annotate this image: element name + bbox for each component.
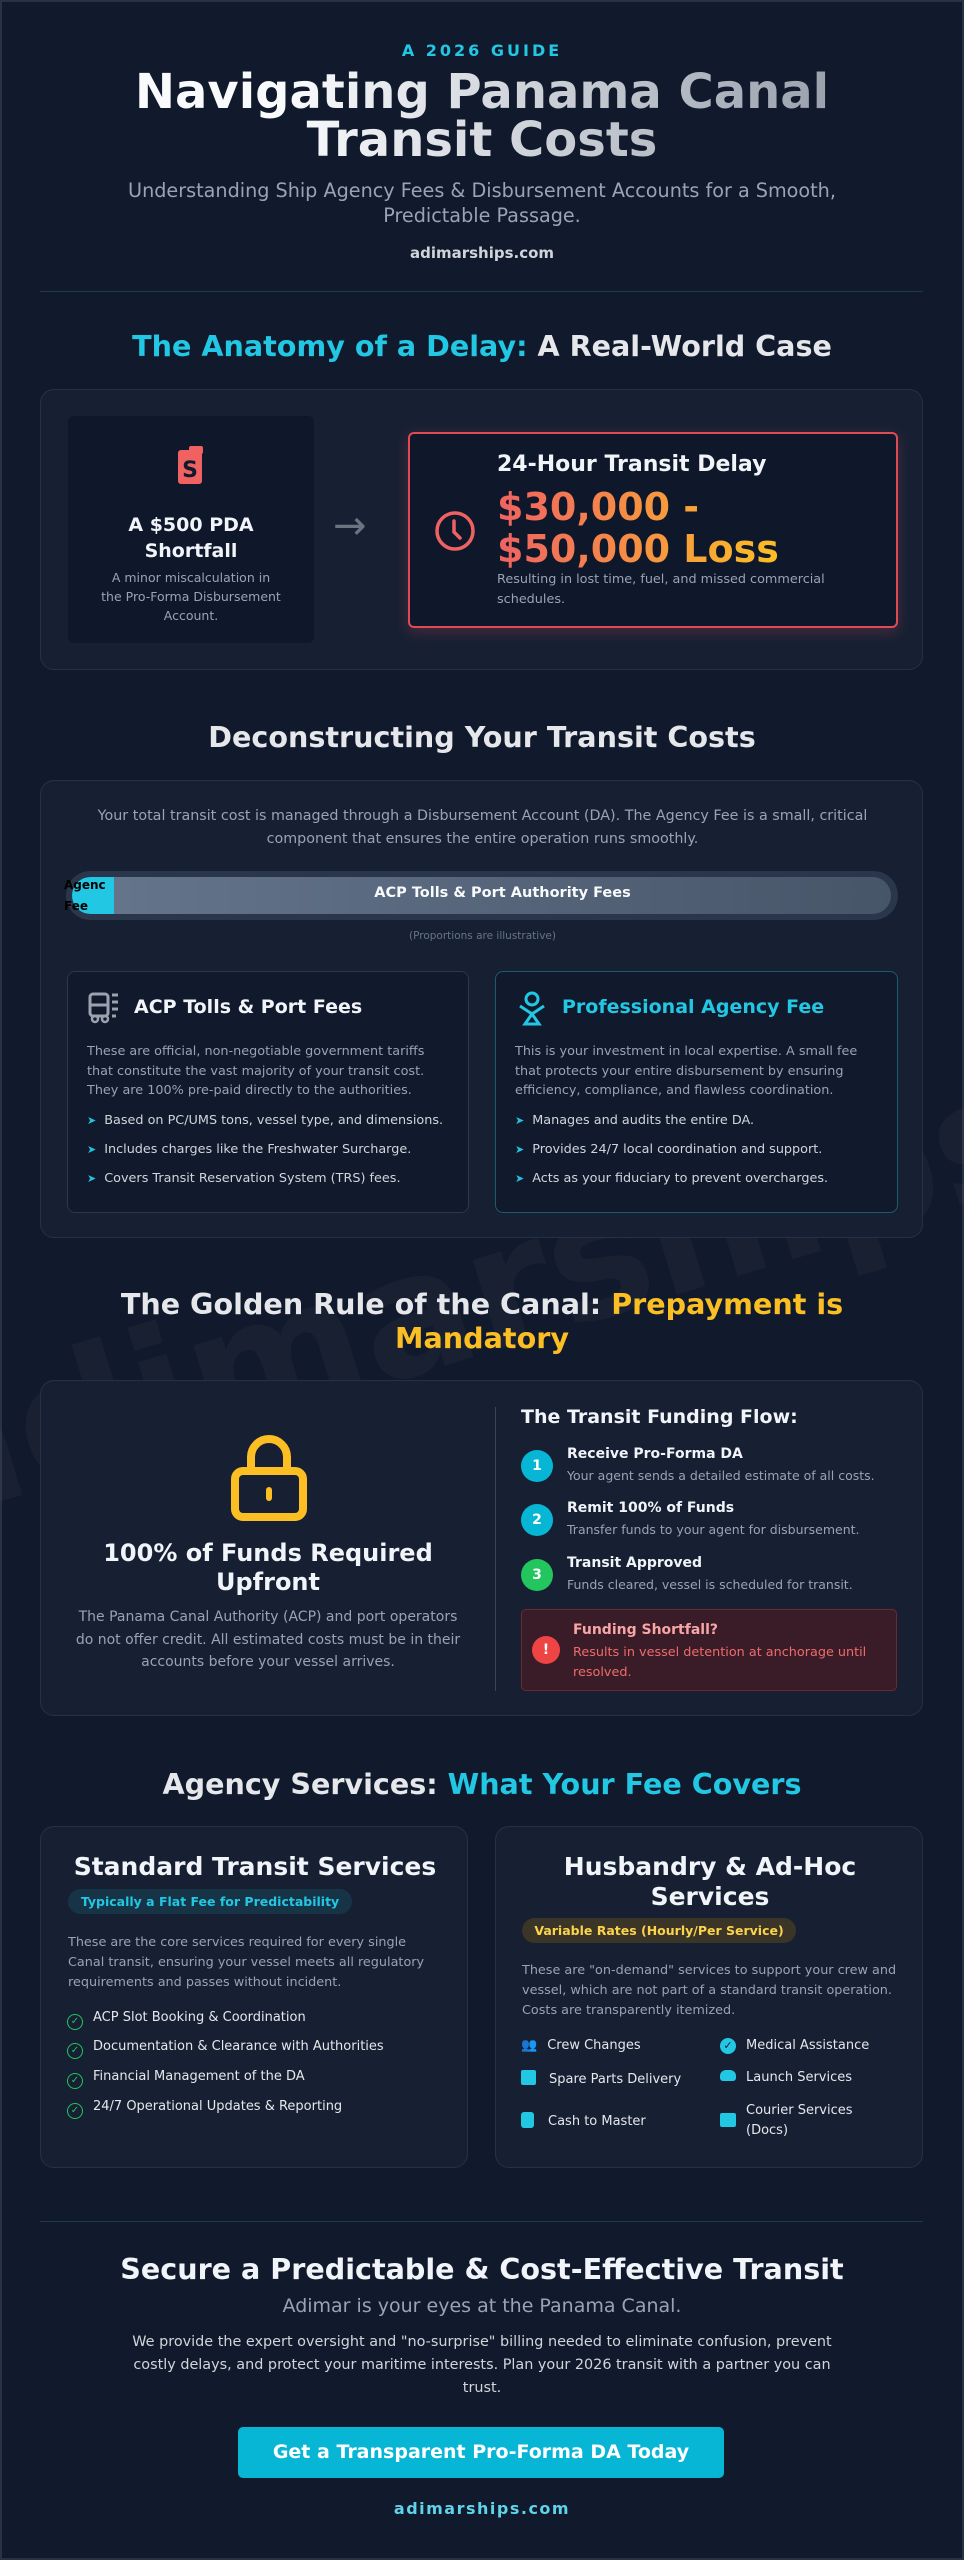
step 2 xyxy=(521,1500,860,1537)
services grid: Courier Services xyxy=(746,2103,853,2118)
checklist: ✓ xyxy=(71,2016,79,2027)
bar chart: proportions: Fee xyxy=(64,899,88,913)
card: ACP tolls: ACP Tolls & Port Fees xyxy=(134,996,362,1018)
card: agency fee: Professional Agency Fee xyxy=(562,996,824,1018)
left box: shortfall: A minor miscalculation in the Pro-Forma Disbursement Account. xyxy=(101,570,281,623)
panel: standard services: Standard Transit Services xyxy=(74,1852,436,1881)
CTA body: We provide the expert oversight and "no-surprise" billing needed to eliminate confusion, prevent costly delays, and protect your maritime interests. Plan your 2026 transit with a partner you can trust. xyxy=(132,2334,832,2396)
card: agency fee: This is your investment in local expertise. A small fee that protects your entire disbursement by ensuring efficiency, compliance, and flawless coordination. xyxy=(515,1044,857,1098)
panel: husbandry services: These are "on-demand" services to support your crew and vessel, which are not part of a standard transit operation. Costs are transparently itemized. xyxy=(522,1963,896,2018)
checklist: Documentation & Clearance with Authorities xyxy=(93,2039,384,2054)
icon: agent xyxy=(519,992,545,1026)
card: agency fee xyxy=(495,971,898,1213)
left box: shortfall: A $500 PDA xyxy=(128,514,254,536)
services grid: ✓ xyxy=(723,2039,733,2052)
icon: toll xyxy=(88,992,118,1024)
card: ACP tolls: ➤ Includes charges like the Freshwater Surcharge. xyxy=(87,1142,411,1157)
button xyxy=(238,2427,724,2478)
checklist xyxy=(67,2010,384,2119)
panel: husbandry services: Variable Rates (Hourly/Per Service) xyxy=(534,1923,784,1938)
icon: lock xyxy=(231,1435,307,1521)
button: Get a Transparent Pro-Forma DA Today xyxy=(273,2441,689,2463)
checklist: 24/7 Operational Updates & Reporting xyxy=(93,2099,342,2114)
panel: standard services xyxy=(40,1826,468,2168)
step 3: Funds cleared, vessel is scheduled for transit. xyxy=(567,1577,853,1592)
checklist: Financial Management of the DA xyxy=(93,2069,305,2084)
step 3: Transit Approved xyxy=(567,1555,702,1571)
panel: prepayment: The Panama Canal Authority (ACP) and port operators do not offer credit. All estimated costs must be in their accounts before your vessel arrives. xyxy=(76,1609,460,1670)
panel: husbandry services: Services xyxy=(651,1882,769,1911)
subtitle: Understanding Ship Agency Fees & Disbursement Accounts for a Smooth, Predictable Passage. xyxy=(128,179,836,227)
services grid: 👥 Crew Changes xyxy=(521,2038,641,2053)
heading: anatomy: The Anatomy of a Delay: A Real-World Case xyxy=(132,329,832,363)
red box: delay: Resulting in lost time, fuel, and missed commercial schedules. xyxy=(497,572,825,607)
panel: costs: Your total transit cost is managed through a Disbursement Account (DA). The Agency Fee is a small, critical component that ensures the entire operation runs smoothly. xyxy=(98,808,867,847)
panel: prepayment: Upfront xyxy=(216,1568,320,1596)
card: ACP tolls: ➤ Covers Transit Reservation System (TRS) fees. xyxy=(87,1171,401,1186)
step 1 xyxy=(521,1446,875,1483)
step 1: Receive Pro-Forma DA xyxy=(567,1446,743,1462)
callout: shortfall: ! xyxy=(543,1642,549,1658)
bar chart: proportions: ACP Tolls & Port Authority Fees xyxy=(374,885,631,901)
red box: delay xyxy=(408,432,898,628)
panel: prepayment xyxy=(40,1380,923,1716)
checklist: ACP Slot Booking & Coordination xyxy=(93,2010,306,2025)
heading: golden rule: The Golden Rule of the Canal: Prepayment is xyxy=(121,1287,843,1321)
card: ACP tolls: These are official, non-negotiable government tariffs that constitute the vast majority of your transit cost. They are 100% pre-paid directly to the authorities. xyxy=(87,1044,424,1098)
callout: shortfall xyxy=(521,1609,897,1691)
title: Transit Costs xyxy=(307,112,657,168)
checklist: ✓ xyxy=(71,2075,79,2086)
card: agency fee: ➤ Acts as your fiduciary to prevent overcharges. xyxy=(515,1171,828,1186)
callout: shortfall: Results in vessel detention at anchorage until resolved. xyxy=(573,1645,866,1680)
panel: standard services: These are the core services required for every single Canal transit, ensuring your vessel meets all regulatory requirements and passes without incident. xyxy=(68,1935,424,1990)
bar chart: proportions xyxy=(66,871,898,920)
step 3: 3 xyxy=(532,1567,542,1583)
card: agency fee: ➤ Provides 24/7 local coordination and support. xyxy=(515,1142,822,1157)
footer url: adimarships.com xyxy=(394,2499,570,2518)
bar chart: proportions: Agenc xyxy=(64,878,106,892)
step 3 xyxy=(521,1555,853,1592)
title: Navigating Panama Canal xyxy=(135,64,829,120)
step 2: 2 xyxy=(532,1512,542,1528)
panel: costs xyxy=(40,780,923,1238)
step 1: 1 xyxy=(532,1458,542,1474)
step 2: Remit 100% of Funds xyxy=(567,1500,734,1516)
panel: standard services: Typically a Flat Fee for Predictability xyxy=(81,1894,339,1909)
callout: shortfall: Funding Shortfall? xyxy=(573,1622,718,1638)
checklist: ✓ xyxy=(71,2045,79,2056)
services grid: Spare Parts Delivery xyxy=(549,2072,681,2087)
heading: agency services: Agency Services: What Your Fee Covers xyxy=(162,1767,802,1801)
red box: delay: 24-Hour Transit Delay xyxy=(497,452,766,477)
services grid: (Docs) xyxy=(746,2123,788,2138)
heading: deconstructing: Deconstructing Your Transit Costs xyxy=(208,720,756,754)
panel: husbandry services xyxy=(495,1826,923,2168)
panel: delay case xyxy=(40,389,923,670)
left box: shortfall xyxy=(68,416,314,643)
heading: golden rule: Mandatory xyxy=(395,1321,569,1355)
icon: clock xyxy=(435,511,475,551)
heading: golden rule xyxy=(121,1287,843,1355)
CTA heading: Secure a Predictable & Cost-Effective Transit xyxy=(120,2252,844,2286)
services grid: Cash to Master xyxy=(548,2114,646,2129)
eyebrow: A 2026 GUIDE xyxy=(402,41,562,60)
panel: prepayment: 100% of Funds Required xyxy=(103,1539,433,1567)
step 1: Your agent sends a detailed estimate of all costs. xyxy=(567,1468,875,1483)
icon: receipt xyxy=(178,446,203,484)
red box: delay: $30,000 - xyxy=(497,485,699,529)
title xyxy=(0,68,964,164)
left box: shortfall: Shortfall xyxy=(145,540,237,562)
card: ACP tolls: ➤ Based on PC/UMS tons, vessel type, and dimensions. xyxy=(87,1113,443,1128)
panel: costs: (Proportions are illustrative) xyxy=(409,930,556,942)
services grid: Medical Assistance xyxy=(746,2038,869,2053)
CTA subtitle: Adimar is your eyes at the Panama Canal. xyxy=(283,2295,681,2317)
icon: receipt: S xyxy=(182,458,198,483)
card: ACP tolls xyxy=(67,971,469,1213)
card: agency fee: ➤ Manages and audits the entire DA. xyxy=(515,1113,754,1128)
services grid xyxy=(521,2038,869,2138)
panel: husbandry services: Husbandry & Ad-Hoc xyxy=(564,1852,856,1881)
url: adimarships.com xyxy=(410,244,554,262)
red box: delay: $50,000 Loss xyxy=(497,527,779,571)
checklist: ✓ xyxy=(71,2105,79,2116)
arrow: → xyxy=(333,503,367,549)
services grid: Launch Services xyxy=(746,2070,852,2085)
funding flow: The Transit Funding Flow: xyxy=(521,1406,798,1428)
step 2: Transfer funds to your agent for disbursement. xyxy=(567,1522,860,1537)
